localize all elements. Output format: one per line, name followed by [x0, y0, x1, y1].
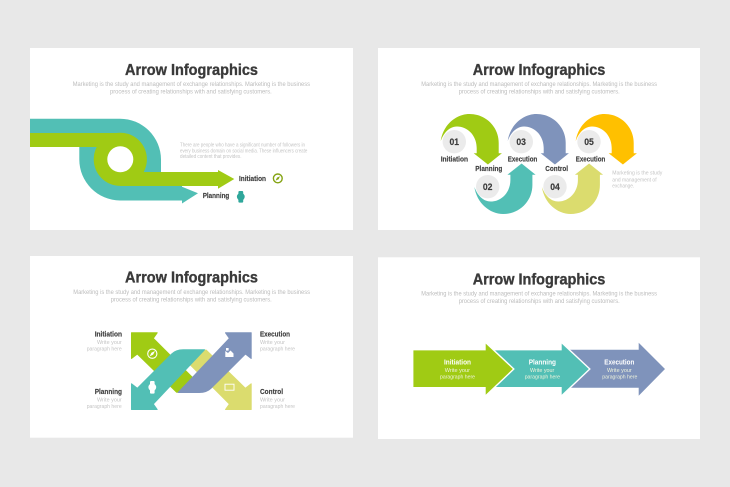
arrow: planning (teal): [30, 119, 198, 204]
curved arrow: 05 yellow: [576, 114, 637, 164]
step text: planning: [525, 358, 560, 380]
step text: execution: Write your: [607, 368, 632, 374]
label: initiation: Write your: [97, 340, 122, 346]
description text: detailed content that provides.: [180, 154, 242, 160]
arrow: control (pale olive): [188, 350, 251, 410]
title: Arrow Infographics: [473, 62, 605, 79]
icon: watch: [148, 381, 156, 394]
title: Arrow Infographics: [125, 62, 258, 79]
label: execution: paragraph here: [260, 346, 295, 352]
step text: initiation: [440, 358, 475, 380]
step text: planning: Write your: [530, 368, 554, 374]
description text: [180, 143, 307, 160]
number badge 01: 01: [450, 137, 460, 148]
icon: compass: [148, 349, 157, 358]
arrow: initiation (green): [413, 342, 514, 396]
arrow: planning (teal): [132, 350, 204, 410]
number badge 03: 03: [516, 137, 526, 148]
label: initiation: Initiation: [239, 174, 266, 183]
side note: and management of: [612, 177, 657, 183]
subtitle: Marketing is the study and management of exchange relationships. Marketing is the business: [421, 290, 657, 297]
subtitle: [73, 81, 310, 96]
arrow: planning (teal): [480, 342, 590, 396]
step text: execution: Execution: [604, 358, 634, 367]
subtitle: Marketing is the study and management of exchange relationships. Marketing is the business: [421, 81, 657, 88]
panel background: [378, 257, 700, 439]
arrow: initiation (green): [30, 133, 234, 189]
subtitle: process of creating relationships with and satisfying customers.: [111, 297, 272, 304]
step text: planning: Planning: [529, 358, 556, 367]
panel background: [378, 48, 700, 230]
subtitle: Marketing is the study and management of exchange relationships. Marketing is the business: [73, 289, 310, 296]
number badge 05: [577, 130, 601, 153]
arrow: execution (blue): [560, 343, 665, 396]
label: control: paragraph here: [260, 404, 295, 410]
side note: exchange.: [612, 184, 635, 190]
step text: execution: paragraph here: [602, 374, 637, 380]
step text: planning: paragraph here: [525, 374, 560, 380]
subtitle: [421, 81, 657, 96]
subtitle: process of creating relationships with and satisfying customers.: [459, 298, 620, 305]
step text: initiation: paragraph here: [440, 374, 475, 380]
label: initiation: Initiation: [95, 329, 122, 338]
arrow: execution (blue): [178, 333, 251, 392]
panel: woven two-arrow knot: [30, 48, 353, 230]
curved arrow: 01 green: [441, 114, 502, 164]
number badge 05: 05: [584, 137, 594, 148]
step text: initiation: Write your: [445, 368, 470, 374]
description text: There are people who have a significant number of followers in: [180, 143, 305, 149]
icon: compass: [273, 174, 282, 183]
label: planning: [87, 387, 122, 410]
step labels: Execution: [508, 154, 537, 163]
step text: execution: [602, 358, 637, 380]
subtitle: Marketing is the study and management of exchange relationships. Marketing is the business: [73, 81, 310, 88]
step labels: Control: [545, 164, 568, 173]
label: initiation: paragraph here: [87, 346, 122, 352]
arrow: initiation (green): [132, 333, 195, 392]
step labels: Execution: [576, 154, 605, 163]
number badge 01: [443, 130, 466, 153]
icon: chart: [225, 348, 234, 357]
label: execution: Write your: [260, 340, 285, 346]
icon: watch: [237, 191, 245, 203]
curved arrow: 03 blue: [508, 114, 569, 164]
panel background: [30, 48, 353, 230]
number badge 02: 02: [483, 182, 492, 193]
label: control: Control: [260, 387, 283, 396]
number badge 04: 04: [550, 182, 560, 193]
label: control: Write your: [260, 398, 285, 404]
label: execution: Execution: [260, 329, 290, 338]
label: execution: [260, 329, 295, 352]
knot hole: [107, 146, 133, 172]
subtitle: [73, 289, 310, 304]
subtitle: process of creating relationships with and satisfying customers.: [110, 89, 272, 96]
title: Arrow Infographics: [473, 271, 605, 288]
curved arrow: 04 pale olive: [542, 164, 603, 214]
label: planning: Write your: [97, 398, 122, 404]
label: initiation: [87, 329, 122, 352]
panel background: [30, 256, 353, 438]
number badge 03: [510, 130, 533, 153]
step labels: [441, 154, 605, 173]
curved arrow: 02 teal: [474, 164, 536, 214]
step labels: Planning: [475, 164, 502, 173]
panel: three chained arrows: [378, 257, 700, 439]
title: Arrow Infographics: [125, 270, 258, 287]
subtitle: [421, 290, 657, 305]
number badge 02: [476, 175, 499, 198]
side note: [612, 171, 662, 190]
panel: five curved arrows: [378, 48, 700, 230]
number badge 04: [543, 175, 567, 198]
label: control: [260, 387, 295, 410]
description text: every business domain on social media. These influencers create: [180, 148, 307, 154]
step text: initiation: Initiation: [444, 358, 471, 367]
label: planning: Planning: [95, 387, 122, 396]
label: planning: paragraph here: [87, 404, 122, 410]
panel: crossing arrows: [30, 256, 353, 438]
label: planning: Planning: [203, 191, 229, 200]
side note: Marketing is the study: [612, 171, 662, 177]
subtitle: process of creating relationships with and satisfying customers.: [459, 89, 620, 96]
step labels: Initiation: [441, 154, 468, 163]
icon: laptop: [225, 384, 234, 390]
